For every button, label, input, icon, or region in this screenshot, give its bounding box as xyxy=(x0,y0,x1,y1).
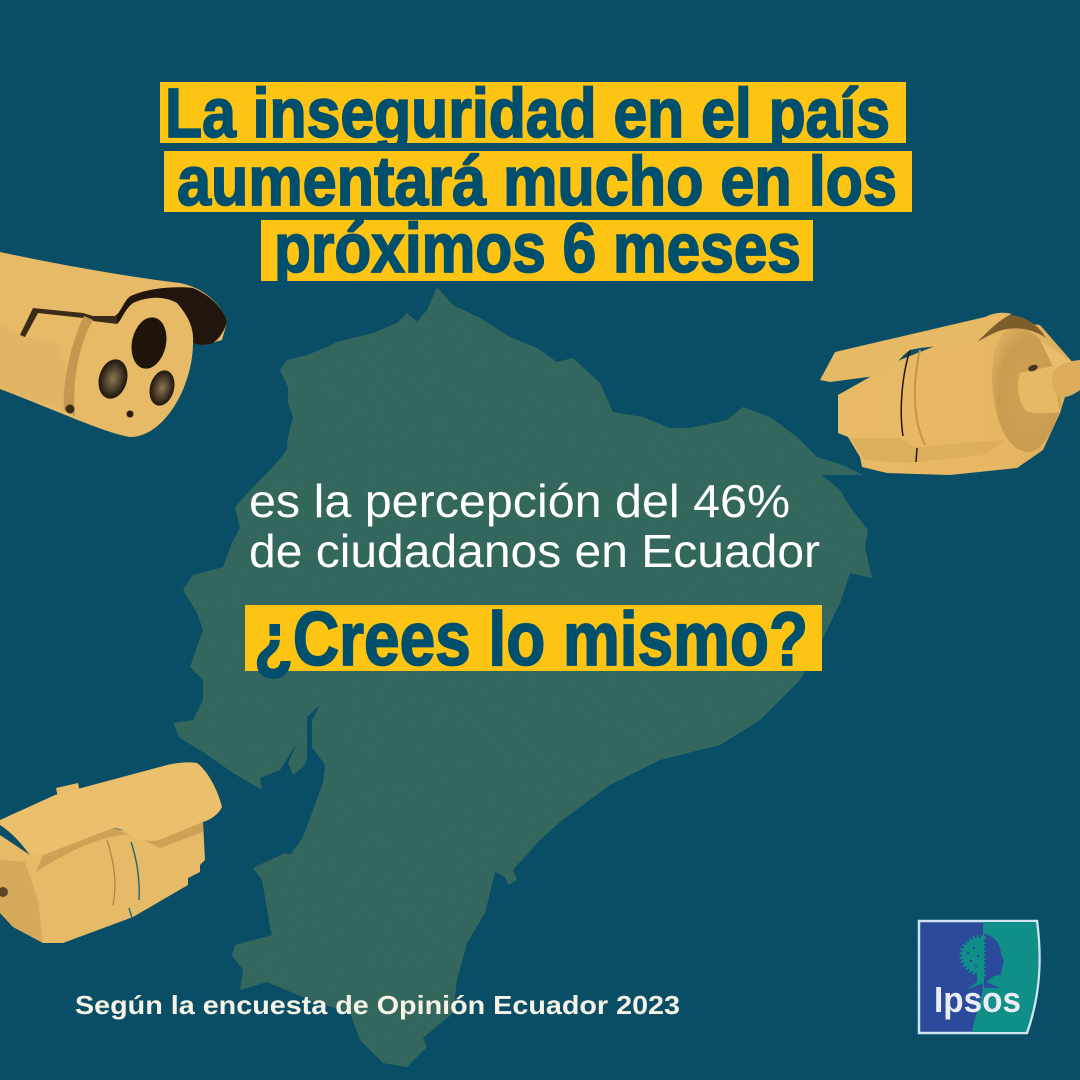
camera: top right xyxy=(820,313,1080,475)
title: line 1: La inseguridad en el país xyxy=(165,74,890,152)
source note: Según la encuesta de Opinión Ecuador 2023 xyxy=(75,990,680,1020)
camera: bottom left xyxy=(0,762,222,943)
body text xyxy=(249,475,820,577)
logo: Ipsos: Ipsos xyxy=(934,979,1021,1020)
lens: main xyxy=(127,314,171,372)
body text: de ciudadanos en Ecuador xyxy=(249,525,820,577)
body text: es la percepción del 46% xyxy=(249,475,790,527)
lens: left xyxy=(94,356,132,402)
logo: Ipsos xyxy=(919,921,1040,1033)
map of Ecuador xyxy=(173,287,872,1067)
title: line 3: próximos 6 meses xyxy=(274,209,801,287)
title: line 2: aumentará mucho en los xyxy=(177,142,897,220)
question callout: ¿Crees lo mismo? xyxy=(254,597,808,682)
camera: top left xyxy=(0,252,227,437)
lens: right xyxy=(146,368,178,408)
